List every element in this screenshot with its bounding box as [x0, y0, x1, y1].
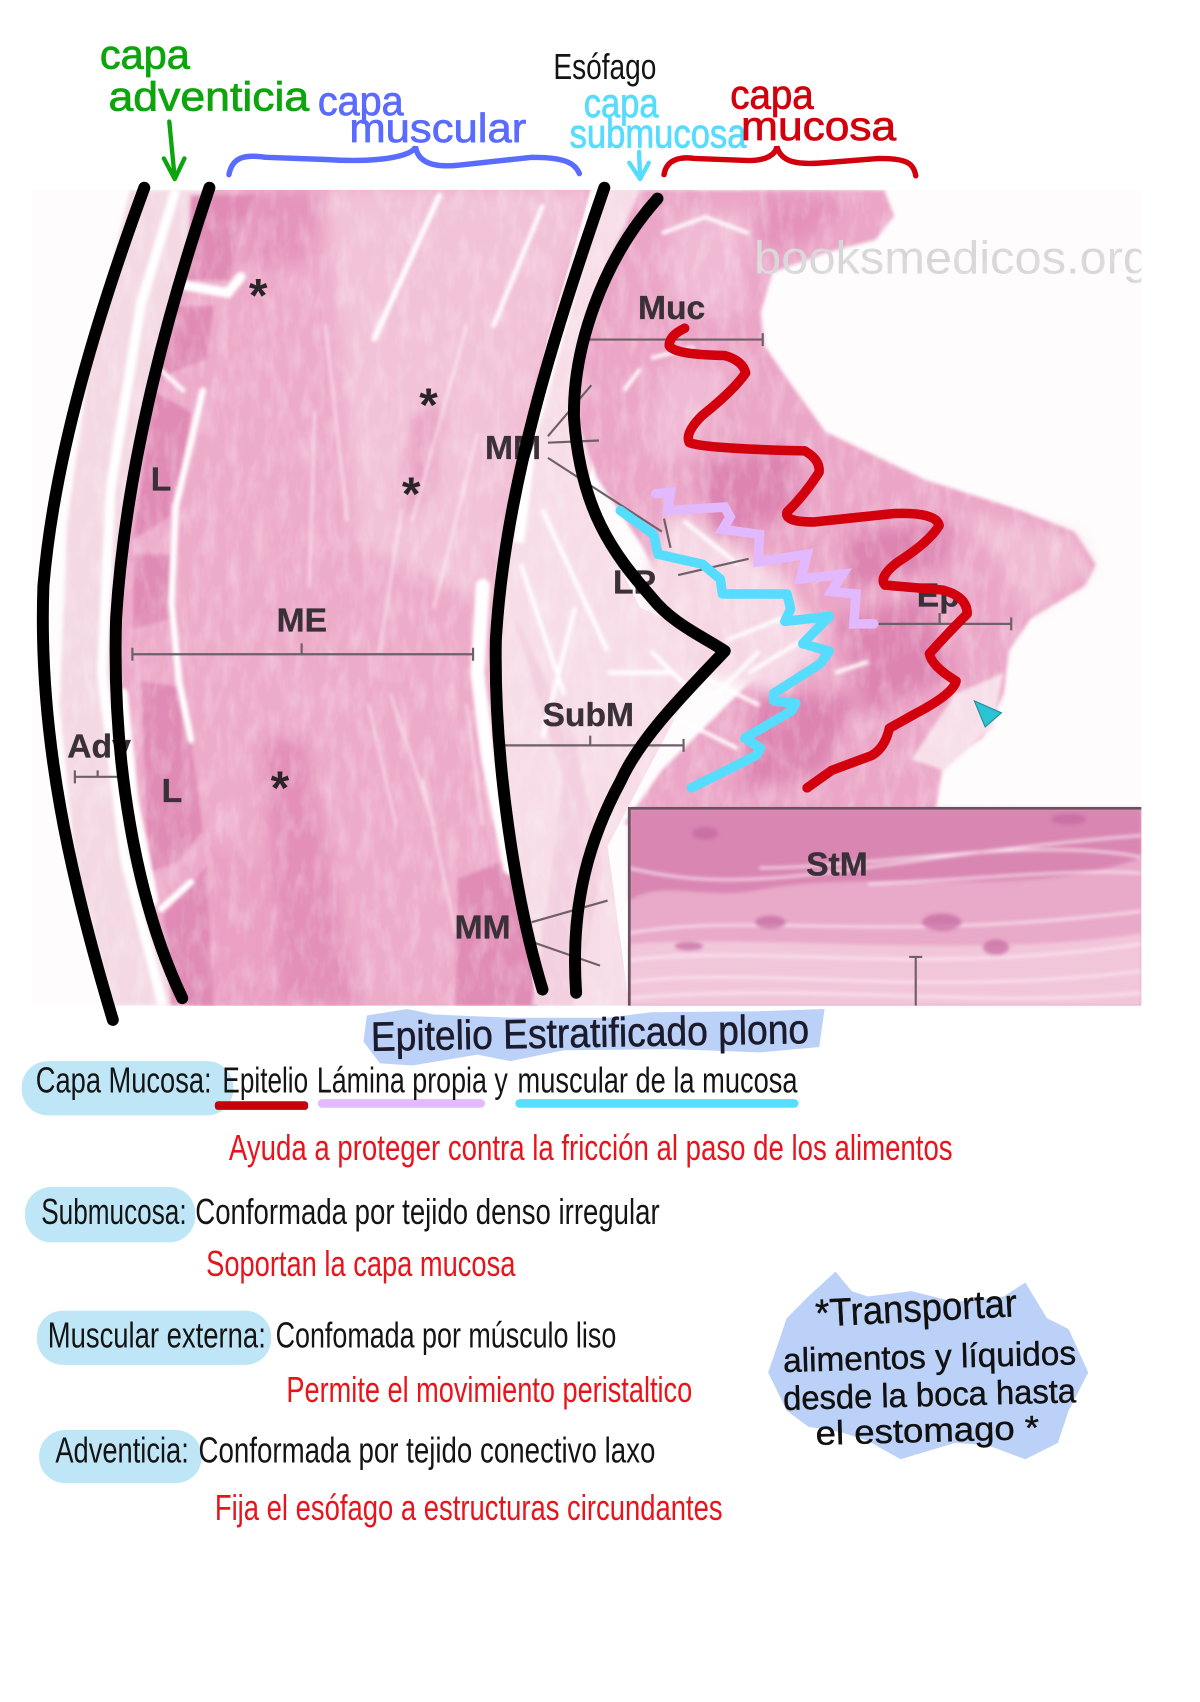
stars: * — [419, 379, 438, 432]
arrow: adventicia — [164, 122, 184, 179]
tissue labels: L — [162, 773, 182, 810]
stars: * — [402, 468, 421, 521]
heading: Epitelio Estratificado plono: Epitelio Estratificado plono — [370, 1006, 810, 1060]
tissue labels: ME — [277, 602, 327, 639]
colored mucosa squiggles — [620, 328, 967, 788]
lilac squiggle — [656, 492, 874, 624]
label: capa mucosa: mucosa — [741, 103, 896, 149]
cyan squiggle — [620, 511, 829, 788]
brace: mucosa — [664, 146, 916, 176]
label: capa muscular: muscular — [349, 105, 527, 151]
tissue labels: Adv — [67, 728, 131, 765]
inset photo — [629, 808, 1141, 1006]
text: epitelio: Epitelio — [222, 1061, 308, 1101]
underline: epitelio — [215, 1101, 308, 1110]
label: capa mucosa: capa — [730, 71, 814, 117]
label: capa submucosa: capa — [584, 80, 659, 126]
text: submucosa: Submucosa: — [41, 1192, 187, 1232]
text: muscular externa: Muscular externa: — [48, 1316, 266, 1356]
measurement and pointer lines — [75, 333, 1011, 966]
stars — [249, 269, 438, 815]
text: funcion muscular: Permite el movimiento peristaltico — [286, 1370, 692, 1410]
tissue labels: Muc — [638, 290, 705, 327]
texture overlay — [33, 190, 1141, 1006]
title: Esófago: Esófago — [553, 47, 656, 87]
label: capa muscular — [318, 78, 527, 151]
label: capa adventicia — [100, 31, 309, 120]
label: capa submucosa: submucosa — [570, 111, 747, 157]
tissue labels: Ep — [917, 578, 960, 615]
text: funcion mucosa: Ayuda a proteger contra la fricción al paso de los alimentos — [229, 1128, 953, 1168]
histology photo — [33, 190, 1150, 1006]
label: capa adventicia: adventicia — [109, 74, 309, 120]
callout: transportar — [768, 1272, 1088, 1459]
tissue labels: SubM — [542, 697, 634, 734]
adventitia tissue — [60, 190, 206, 1006]
watermark: booksmedicos.org — [754, 231, 1150, 283]
underline: lamina propia — [318, 1099, 485, 1108]
tissue labels — [67, 290, 960, 947]
tissue labels: MM — [455, 910, 511, 947]
text: funcion submucosa: Soportan la capa mucosa — [206, 1244, 515, 1284]
tissue labels: LP — [613, 564, 656, 601]
text: adventicia: Adventicia: — [55, 1431, 189, 1471]
pill: submucosa — [25, 1187, 195, 1242]
pill: adventicia — [39, 1430, 202, 1483]
text: funcion adventicia: Fija el esófago a estructuras circundantes — [215, 1488, 723, 1528]
icon: cyan arrowhead — [974, 701, 1001, 727]
text: conformada laxo: Conformada por tejido conectivo laxo — [199, 1431, 655, 1471]
label: capa muscular: capa — [318, 78, 404, 124]
label: capa adventicia: capa — [100, 31, 190, 77]
black layer boundary lines — [43, 188, 725, 1020]
row: capa mucosa — [22, 1061, 799, 1115]
tissue labels: StM — [806, 847, 868, 884]
brace: muscular — [229, 146, 579, 175]
label: capa submucosa — [570, 80, 747, 157]
label: capa mucosa — [730, 71, 896, 149]
arrow: submucosa — [629, 152, 649, 179]
callout: transportar: el estomago * — [815, 1410, 1040, 1453]
row: adventicia — [39, 1430, 655, 1483]
text: capa mucosa: Capa Mucosa: — [36, 1061, 212, 1101]
red squiggle — [669, 328, 967, 788]
text: muscular de la mucosa: muscular de la mucosa — [518, 1061, 798, 1101]
callout: transportar: *Transportar — [814, 1282, 1018, 1336]
underline: muscular de la mucosa — [515, 1099, 799, 1108]
mucosa tissue — [575, 190, 1096, 825]
stars: * — [249, 269, 268, 322]
muscularis externa tissue — [114, 190, 591, 1006]
callout: transportar: alimentos y líquidos — [783, 1335, 1076, 1380]
tissue labels: L — [151, 461, 171, 498]
submucosa tissue — [502, 190, 700, 1006]
callout: transportar: desde la boca hasta — [783, 1373, 1077, 1418]
pill: capa mucosa — [22, 1061, 233, 1115]
text: lamina propia y: Lámina propia y — [317, 1061, 508, 1101]
text: conformada denso: Conformada por tejido denso irregular — [195, 1192, 660, 1232]
row: muscular externa — [37, 1311, 616, 1365]
white separations — [122, 195, 542, 933]
pill: muscular externa — [37, 1311, 271, 1365]
longitudinal muscle bundles — [133, 195, 255, 1006]
stars: * — [271, 762, 290, 815]
row: submucosa — [25, 1187, 660, 1242]
tissue labels: MM — [485, 430, 541, 467]
text: conformada liso: Confomada por músculo liso — [276, 1316, 616, 1356]
